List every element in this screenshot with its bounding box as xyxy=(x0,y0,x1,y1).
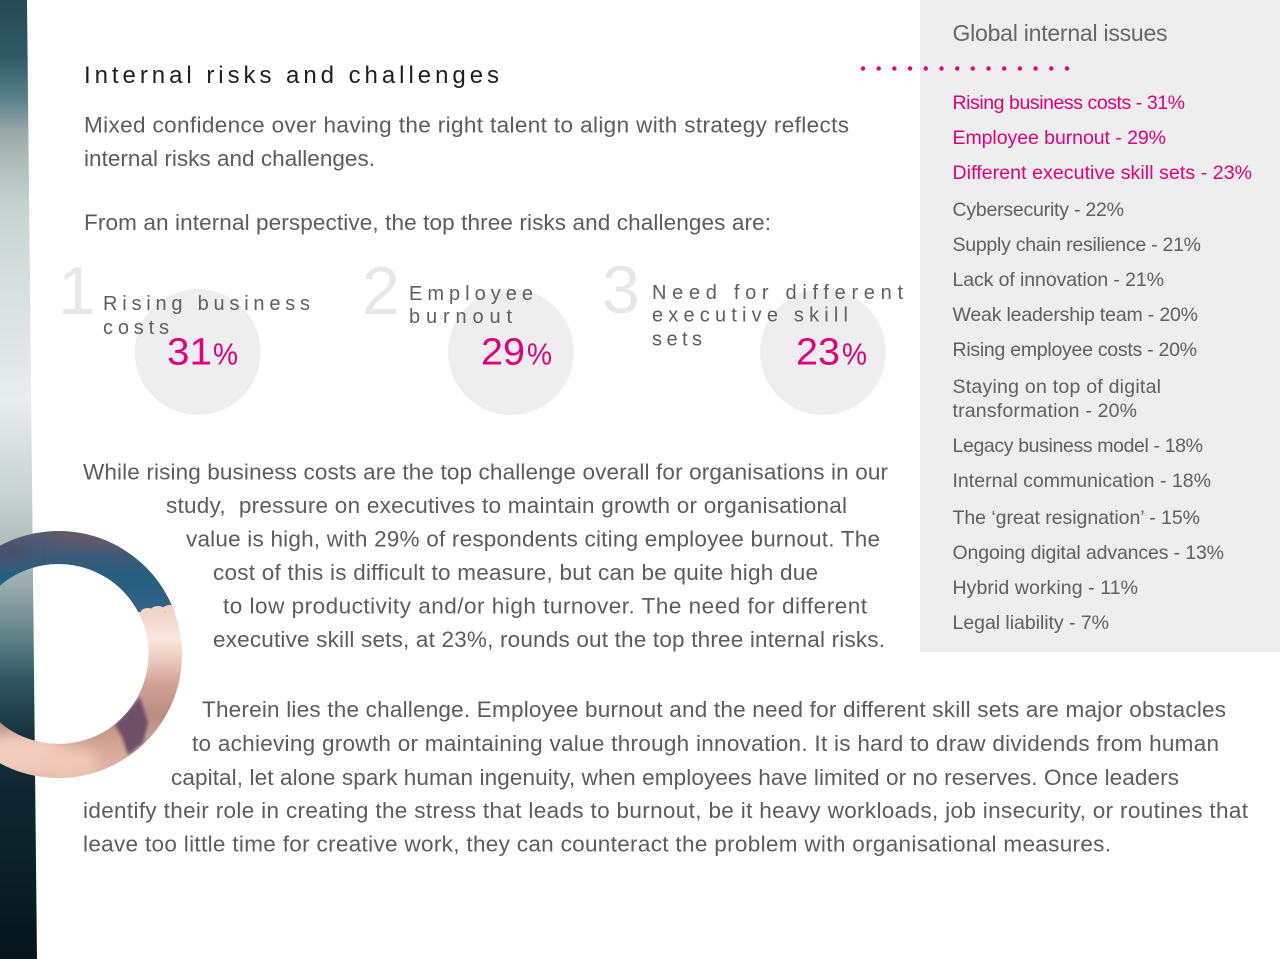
stat 1: rising business costs xyxy=(58,253,310,415)
stat 2: employee burnout: 2 xyxy=(362,253,400,329)
body paragraph: the challenge: leave too little time for creative work, they can counteract the problem with organisational measures. xyxy=(83,832,1111,856)
stat 1: rising business costs: % xyxy=(213,336,238,372)
list: other issues: Supply chain resilience - 21% xyxy=(952,234,1201,256)
list: top three issues highlighted: Employee burnout - 29% xyxy=(952,127,1166,149)
body paragraph: the challenge: identify their role in creating the stress that leads to burnout, be it heavy workloads, job insecurity, or routines that xyxy=(83,798,1249,823)
stat 3: different executive skill sets: Need for different xyxy=(652,282,903,304)
stat 3: different executive skill sets xyxy=(602,252,903,415)
body paragraph: top challenges: to low productivity and/or high turnover. The need for different xyxy=(223,594,868,618)
stat 3: different executive skill sets: % xyxy=(842,336,867,372)
stat 2: employee burnout xyxy=(362,253,574,415)
list: other issues: Rising employee costs - 20% xyxy=(952,339,1197,361)
stat 3: different executive skill sets: 23 xyxy=(796,332,840,374)
list: other issues: The ‘great resignation’ - 15% xyxy=(952,507,1200,529)
body paragraph: top challenges: value is high, with 29% of respondents citing employee burnout. The xyxy=(186,526,880,552)
dotted divider xyxy=(861,66,1069,71)
stat 1: rising business costs: costs xyxy=(103,317,169,339)
stat 1: rising business costs: 31 xyxy=(167,332,212,374)
list: other issues: Legal liability - 7% xyxy=(952,612,1109,634)
stat 2: employee burnout: burnout xyxy=(409,306,512,328)
body paragraph: top challenges: While rising business costs are the top challenge overall for organisations in our xyxy=(83,460,888,484)
body paragraph: the challenge: capital, let alone spark human ingenuity, when employees have limited or no reserves. Once leaders xyxy=(171,765,1179,790)
body paragraph: top challenges: study, pressure on executives to maintain growth or organisational xyxy=(166,493,847,518)
heading: Internal risks and challenges xyxy=(84,62,499,89)
intro text xyxy=(84,112,849,235)
list: top three issues highlighted: Rising business costs - 31% xyxy=(952,92,1185,114)
stat 1: rising business costs: Rising business xyxy=(103,293,310,315)
body paragraph: the challenge: to achieving growth or maintaining value through innovation. It is hard to draw dividends from human xyxy=(192,731,1219,756)
intro text: internal risks and challenges. xyxy=(84,146,375,171)
stat 3: different executive skill sets: sets xyxy=(652,328,702,350)
intro text: Mixed confidence over having the right talent to align with strategy reflects xyxy=(84,112,849,138)
list: other issues: Weak leadership team - 20% xyxy=(952,304,1198,326)
panel heading: global internal issues: Global internal issues xyxy=(952,20,1168,46)
body paragraph: top challenges xyxy=(83,460,888,652)
list: top three issues highlighted xyxy=(952,92,1252,184)
list: other issues: Legacy business model - 18% xyxy=(952,435,1203,457)
list: other issues: Lack of innovation - 21% xyxy=(952,269,1164,291)
left image strip xyxy=(0,0,37,959)
list: other issues: Staying on top of digital xyxy=(952,376,1161,398)
gradient ring image xyxy=(0,525,190,785)
list: top three issues highlighted: Different executive skill sets - 23% xyxy=(952,162,1252,184)
stat 2: employee burnout: % xyxy=(527,336,552,372)
list: other issues xyxy=(952,199,1224,634)
body paragraph: the challenge xyxy=(83,697,1249,856)
stat 2: employee burnout: Employee xyxy=(409,283,533,305)
list: other issues: Internal communication - 18% xyxy=(952,470,1211,492)
body paragraph: top challenges: cost of this is difficult to measure, but can be quite high due xyxy=(213,560,818,585)
stat 2: employee burnout: 29 xyxy=(481,332,525,374)
body paragraph: top challenges: executive skill sets, at 23%, rounds out the top three internal risks. xyxy=(213,627,885,652)
right panel background xyxy=(920,0,1280,652)
body paragraph: the challenge: Therein lies the challenge. Employee burnout and the need for different skill sets are major obstacles xyxy=(202,697,1226,722)
list: other issues: Cybersecurity - 22% xyxy=(952,199,1124,221)
stat 1: rising business costs: 1 xyxy=(58,253,96,329)
intro text: From an internal perspective, the top three risks and challenges are: xyxy=(84,210,771,235)
stat 3: different executive skill sets: executive skill xyxy=(652,304,848,326)
list: other issues: Ongoing digital advances - 13% xyxy=(952,542,1224,564)
stat 3: different executive skill sets: 3 xyxy=(602,252,640,328)
list: other issues: Hybrid working - 11% xyxy=(952,577,1138,599)
list: other issues: transformation - 20% xyxy=(952,400,1137,422)
